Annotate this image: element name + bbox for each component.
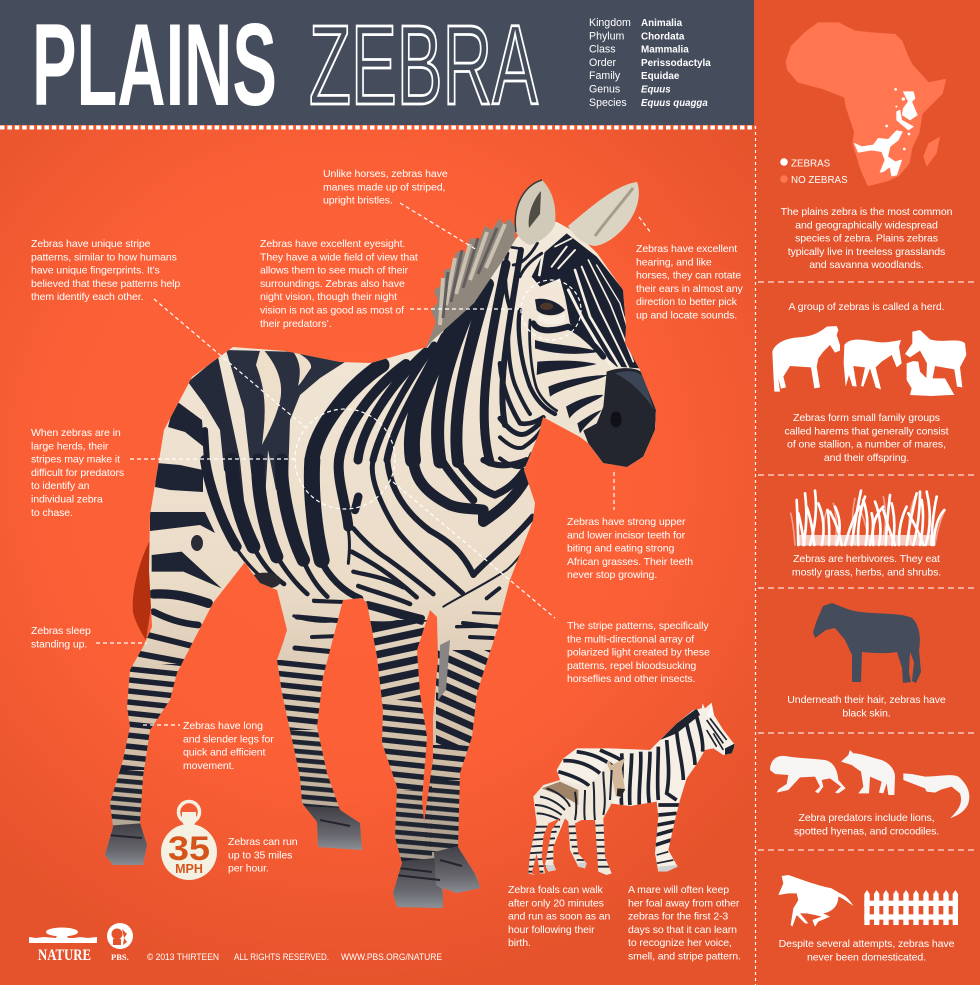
callout: teeth: and lower incisor teeth for bbox=[567, 529, 686, 541]
callout: mares: days so that it can learn bbox=[628, 924, 737, 936]
title word: PLAINS: PLAINS bbox=[32, 0, 277, 130]
callout: manes: upright bristles. bbox=[323, 195, 393, 207]
callout: legs: movement. bbox=[183, 760, 234, 772]
callout: hearing: up and locate sounds. bbox=[636, 310, 737, 322]
callout: speed: Zebras can run bbox=[228, 836, 298, 848]
callout: eyesight: allows them to see much of their bbox=[260, 265, 409, 277]
callout: hearing: hearing, and like bbox=[636, 256, 712, 268]
text: domestication: never been domesticated. bbox=[807, 951, 926, 963]
illustration: main zebra photo bbox=[95, 170, 665, 915]
callout: hearing: horses, they can rotate bbox=[636, 270, 741, 282]
icon: grass bbox=[791, 491, 945, 546]
text: herbivores: Zebras are herbivores. They eat bbox=[793, 553, 940, 565]
panel: right sidebar background bbox=[755, 0, 980, 985]
rump stripes bbox=[150, 347, 345, 625]
map legend bbox=[780, 158, 848, 186]
taxonomy table: Equus bbox=[641, 84, 671, 96]
callout: large herds: When zebras are in bbox=[31, 427, 121, 439]
text: harems: Zebras form small family groups bbox=[793, 412, 940, 424]
callout: sleep: standing up. bbox=[31, 638, 87, 650]
callout: large herds: to identify an bbox=[31, 480, 90, 492]
callout: stripe function: polarized light created by these bbox=[567, 647, 710, 659]
callout: unique patterns: Zebras have unique stripe bbox=[31, 238, 151, 250]
callout: stripe function: patterns, repel bloodsucking bbox=[567, 660, 696, 672]
footer credits: WWW.PBS.ORG/NATURE bbox=[341, 952, 442, 963]
callout: teeth: African grasses. Their teeth bbox=[567, 556, 693, 568]
taxonomy table: Perissodactyla bbox=[641, 58, 711, 69]
callout: mares: her foal away from other bbox=[628, 897, 740, 909]
taxonomy table: Family bbox=[589, 70, 621, 82]
callout: legs: Zebras have long bbox=[183, 720, 263, 732]
text: domestication: Despite several attempts, zebras have bbox=[779, 938, 955, 950]
text: predators: Zebra predators include lions, bbox=[799, 812, 934, 824]
icon: running zebra bbox=[778, 875, 853, 927]
callout: foals: Zebra foals can walk bbox=[508, 884, 604, 896]
logo: PBS bbox=[107, 923, 133, 962]
taxonomy table: Chordata bbox=[641, 31, 685, 42]
callout: manes: manes made up of striped, bbox=[323, 181, 445, 193]
callout: stripe function: the multi-directional array of bbox=[567, 633, 694, 645]
muzzle bbox=[583, 368, 656, 467]
icon: stopwatch 35 mph: 35 bbox=[168, 830, 210, 868]
taxonomy table: Order bbox=[589, 57, 617, 69]
taxonomy table: Class bbox=[589, 44, 616, 56]
logo: PBS: PBS. bbox=[111, 952, 129, 962]
callout: manes: Unlike horses, zebras have bbox=[323, 168, 448, 180]
leader lines and focus circles bbox=[96, 203, 651, 725]
taxonomy table: Phylum bbox=[589, 30, 624, 42]
icon: dark zebra silhouette bbox=[813, 603, 921, 683]
taxonomy table: Kingdom bbox=[589, 17, 631, 29]
text: black skin: black skin. bbox=[842, 707, 891, 719]
callout: hearing: Zebras have excellent bbox=[636, 243, 737, 255]
text: range: species of zebra. Plains zebras bbox=[795, 233, 938, 245]
callout: foals: and run as soon as an bbox=[508, 911, 611, 923]
callout: eyesight: night vision, though their night bbox=[260, 291, 397, 303]
panel: black skin bbox=[787, 603, 946, 719]
text: black skin: Underneath their hair, zebras have bbox=[787, 694, 946, 706]
taxonomy table: Equus quagga bbox=[641, 98, 708, 109]
map legend: ZEBRAS bbox=[791, 158, 831, 170]
text: predators: spotted hyenas, and crocodiles. bbox=[794, 825, 939, 837]
callout: eyesight: vision is not as good as most of bbox=[260, 304, 404, 316]
callout: hearing: direction to better pick bbox=[636, 296, 738, 308]
callout: foals: after only 20 minutes bbox=[508, 897, 604, 909]
zebra tail bbox=[133, 540, 152, 640]
illustration: mare and foal bbox=[527, 700, 740, 878]
body stripes, lower part bbox=[205, 460, 533, 627]
taxonomy table: Mammalia bbox=[641, 45, 689, 56]
callout: teeth: never stop growing. bbox=[567, 569, 657, 581]
icon: zebra herd silhouettes bbox=[772, 326, 966, 396]
foal bbox=[528, 758, 625, 875]
leg stripes bbox=[100, 620, 510, 862]
icon: lion, hyena, crocodile silhouettes bbox=[770, 750, 969, 818]
footer credits bbox=[147, 952, 442, 963]
callout: hearing: their ears in almost any bbox=[636, 283, 743, 295]
callout: large herds: to chase. bbox=[31, 507, 73, 519]
map of Africa bbox=[787, 23, 945, 185]
callout: mares: to recognize her voice, bbox=[628, 937, 732, 949]
text: harems: and their offspring. bbox=[824, 452, 909, 464]
text: range: and geographically widespread bbox=[795, 219, 938, 231]
callout: teeth: Zebras have strong upper bbox=[567, 516, 686, 528]
callout: eyesight: their predators’. bbox=[260, 318, 332, 330]
callout: legs: and slender legs for bbox=[183, 733, 274, 745]
callout: stripe function: horseflies and other insects. bbox=[567, 673, 695, 685]
callout: unique patterns: have unique fingerprints. It’s bbox=[31, 265, 160, 277]
taxonomy table bbox=[589, 17, 711, 109]
callout: unique patterns: patterns, similar to how humans bbox=[31, 251, 177, 263]
callout: speed: per hour. bbox=[228, 863, 269, 875]
callout: eyesight: They have a wide field of view that bbox=[260, 251, 418, 263]
title word: ZEBRA: ZEBRA bbox=[309, 2, 538, 128]
callout: mares: A mare will often keep bbox=[628, 884, 729, 896]
callout: large herds: stripes may make it bbox=[31, 454, 120, 466]
callout: unique patterns: believed that these patterns help bbox=[31, 278, 180, 290]
panel: diet bbox=[791, 491, 945, 578]
callout: unique patterns: them identify each other. bbox=[31, 291, 143, 303]
callout: mares: zebras for the first 2-3 bbox=[628, 911, 728, 923]
callout: eyesight: Zebras have excellent eyesight. bbox=[260, 238, 405, 250]
callout: foals: birth. bbox=[508, 937, 531, 949]
head markings bbox=[500, 233, 656, 467]
callout: stripe function: The stripe patterns, specifically bbox=[567, 620, 709, 632]
text: harems: of one stallion, a number of mares, bbox=[787, 439, 946, 451]
panel: title header bbox=[0, 0, 754, 130]
body and flank stripes, upper part bbox=[205, 250, 521, 462]
callout: legs: quick and efficient bbox=[183, 747, 266, 759]
callout: speed: up to 35 miles bbox=[228, 849, 292, 861]
taxonomy table: Species bbox=[589, 97, 627, 109]
text: range: The plains zebra is the most common bbox=[781, 206, 953, 218]
logo: Nature bbox=[29, 928, 97, 964]
map legend: NO ZEBRAS bbox=[791, 175, 848, 186]
zebra left ear bbox=[515, 180, 555, 245]
zebra mane bbox=[426, 218, 515, 347]
zebra right ear bbox=[568, 182, 639, 246]
panel: range map bbox=[780, 23, 953, 271]
icon: stopwatch 35 mph bbox=[161, 802, 217, 880]
taxonomy table: Equidae bbox=[641, 71, 680, 82]
icon: stopwatch 35 mph: MPH bbox=[175, 862, 203, 876]
callout: large herds: large herds, their bbox=[31, 440, 109, 452]
text: range: typically live in treeless grasslands bbox=[788, 246, 945, 258]
callout: large herds: difficult for predators bbox=[31, 467, 124, 479]
callout: foals: hour following their bbox=[508, 924, 595, 936]
mare bbox=[553, 700, 740, 877]
hooves bbox=[100, 806, 482, 910]
callout: eyesight: surroundings. Zebras also have bbox=[260, 278, 405, 290]
callout: mares: smell, and stripe pattern. bbox=[628, 950, 741, 962]
text: range: and savanna woodlands. bbox=[809, 259, 924, 271]
panel: predators bbox=[770, 750, 969, 837]
callout: large herds: individual zebra bbox=[31, 494, 103, 506]
text: herbivores: mostly grass, herbs, and shrubs. bbox=[792, 566, 941, 578]
icon: fence bbox=[864, 890, 958, 925]
callout: sleep: Zebras sleep bbox=[31, 625, 91, 637]
text: herd: A group of zebras is called a herd. bbox=[789, 301, 944, 313]
panel: herd bbox=[772, 301, 966, 464]
taxonomy table: Animalia bbox=[641, 18, 683, 29]
taxonomy table: Genus bbox=[589, 84, 620, 96]
hind leg upper stripes bbox=[140, 601, 498, 662]
panel: domestication bbox=[778, 875, 958, 963]
text: harems: called harems that generally consist bbox=[784, 425, 949, 437]
logo: Nature: NATURE bbox=[38, 947, 91, 964]
zebra body and stripes bbox=[105, 222, 656, 908]
callout: teeth: biting and eating strong bbox=[567, 543, 674, 555]
footer credits: ALL RIGHTS RESERVED. bbox=[234, 952, 329, 963]
footer credits: © 2013 THIRTEEN bbox=[147, 952, 219, 963]
